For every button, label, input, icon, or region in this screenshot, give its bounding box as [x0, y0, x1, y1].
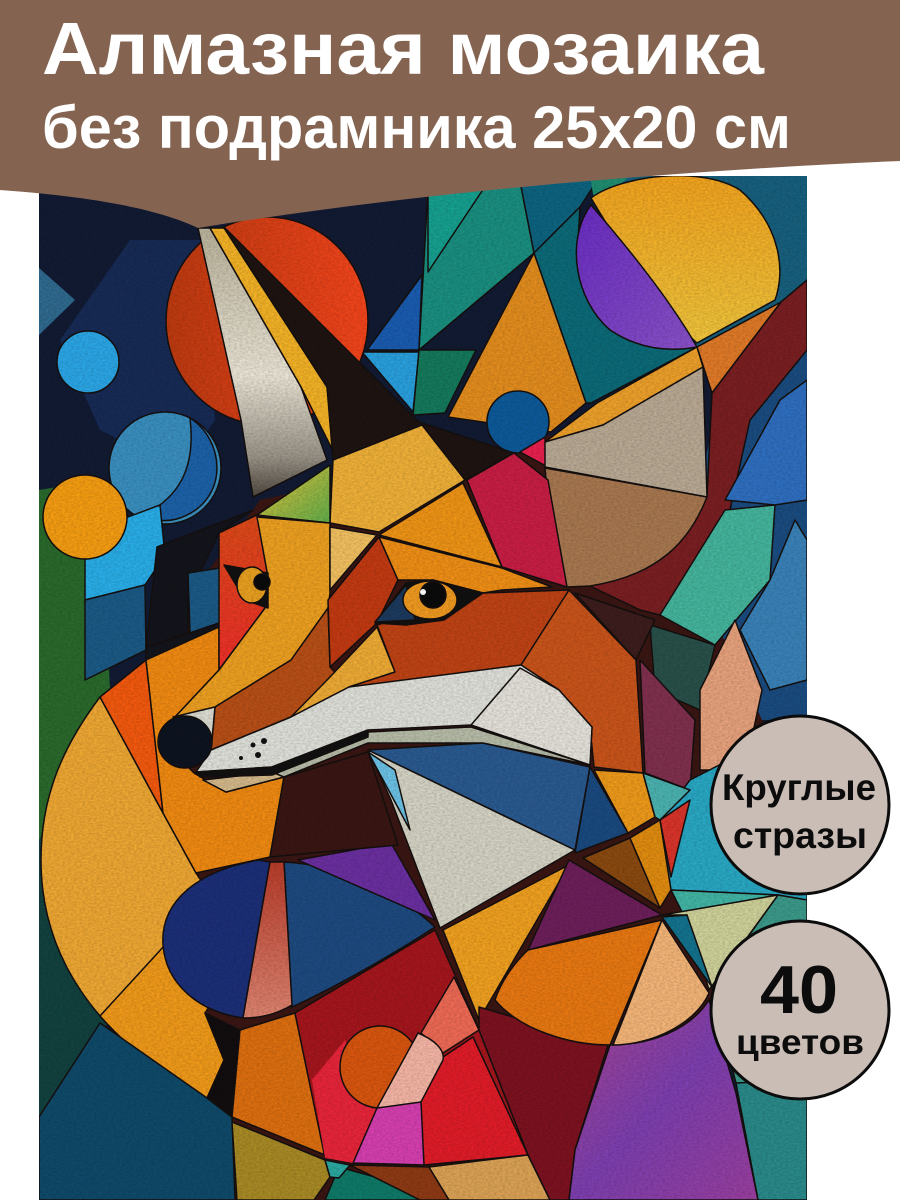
lower right shards — [443, 720, 807, 1200]
top-right geometric shards — [362, 176, 697, 432]
black arch — [146, 510, 253, 665]
navy circle chest — [163, 843, 435, 1018]
fox nose — [158, 716, 267, 768]
badge: round rhinestones — [711, 716, 889, 894]
neck and chest — [270, 743, 655, 928]
right fur shards — [520, 280, 807, 790]
fox face — [175, 425, 643, 773]
painting: cubist fox — [39, 176, 807, 1200]
badge: 40 colours — [711, 921, 889, 1099]
badge: 40 colours: 40 — [760, 952, 838, 1028]
bottom-left panels — [39, 1013, 330, 1200]
header banner — [0, 0, 900, 228]
gold circle — [591, 176, 780, 343]
title line 1: Алмазная мозаика — [42, 7, 765, 90]
purple lens — [576, 205, 697, 349]
badge: 40 colours: цветов — [736, 1023, 864, 1062]
painting background — [39, 176, 807, 1200]
fox eye left — [224, 565, 270, 608]
fox eye right — [375, 580, 483, 625]
fox ear — [198, 227, 514, 497]
fox muzzle — [173, 665, 592, 792]
badge: round rhinestones: Круглые — [722, 767, 876, 808]
fox body orange — [41, 627, 284, 1100]
bottom centre panels — [325, 1155, 550, 1200]
left circles — [43, 331, 221, 680]
red circle — [166, 217, 368, 425]
lower red block — [295, 930, 528, 1165]
title line 2: без подрамника 25х20 см — [42, 94, 791, 161]
blue circle behind ear — [487, 391, 549, 453]
badge: round rhinestones: стразы — [733, 815, 867, 856]
